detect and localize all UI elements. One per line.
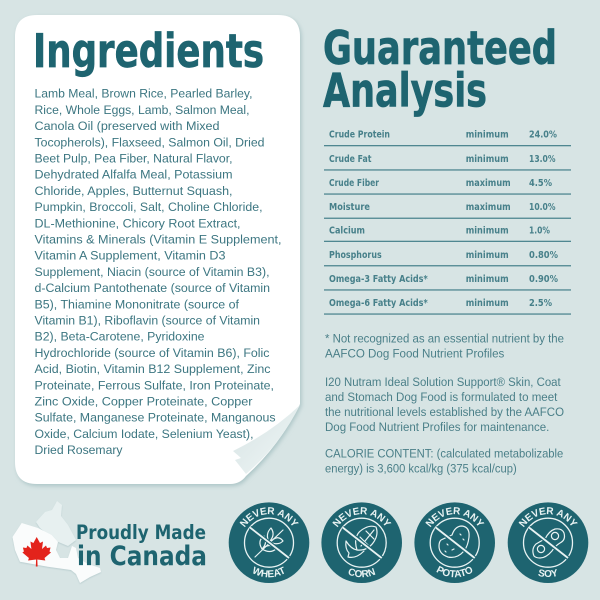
row: omega-3: Omega-3 Fatty Acids* [329,274,428,285]
icon: wheat [255,528,283,557]
text block: aafco footnote: * Not recognized as an essential nutrient by the [325,332,564,346]
badge: never any soy: NEVER ANY [518,507,578,528]
ingredients list: DL-Methionine, Chicory Root Extract, [34,216,241,230]
ingredients list: Proteinate, Ferrous Sulfate, Iron Proteinate, [34,378,274,392]
slogan: Proudly Made [76,521,206,544]
row: phosphorus [324,250,571,266]
row: omega-6 [324,298,571,315]
row: omega-6: 2.5% [529,298,552,309]
row: omega-6: minimum [466,298,509,309]
icon: soybean pod [533,529,564,558]
row: omega-3 [324,274,571,291]
ingredients list: B2), Beta-Carotene, Pyridoxine [34,330,205,344]
ingredients list: Vitamin A Supplement, Vitamin D3 [34,249,226,263]
row: moisture: maximum [466,202,511,213]
row: crude fiber: Crude Fiber [329,178,379,189]
table: guaranteed analysis values [324,130,571,315]
icon: potato [439,526,469,557]
slogan: in Canada [77,541,207,572]
icon: maple leaf [22,537,51,566]
ingredients list: Rice, Whole Eggs, Lamb, Salmon Meal, [34,103,250,117]
badge: never any soy [508,502,588,583]
row: crude protein: Crude Protein [329,130,390,140]
row: moisture: Moisture [329,202,370,213]
row: phosphorus: 0.80% [529,250,558,261]
badge: never any soy: SOY [538,569,557,577]
ingredients list: Vitamins & Minerals (Vitamin E Supplement, [34,232,282,246]
panel: ingredients card [15,15,300,484]
row: omega-3: 0.90% [529,274,558,285]
row: crude fiber [324,178,571,195]
ingredients list: Zinc Oxide, Copper Proteinate, Copper [34,394,252,408]
badge: never any wheat: WHEAT [253,566,284,578]
page curl [233,405,300,474]
badge: never any potato: NEVER ANY [425,507,484,528]
ingredients list: Beet Pulp, Pea Fiber, Natural Flavor, [34,152,232,166]
row: calcium: minimum [466,226,509,236]
ingredients list [34,87,282,457]
row: crude fat: Crude Fat [329,154,372,165]
ingredients list: Chloride, Apples, Butternut Squash, [34,184,232,198]
badge: proudly made in canada [12,501,207,583]
ingredients list: Vitamin B1), Riboflavin (source of Vitamin [34,314,260,328]
ingredients list: Sulfate, Manganese Proteinate, Manganous [34,411,276,425]
ingredients list: d-Calcium Pantothenate (source of Vitamin [34,281,270,295]
ingredients list: Tocopherols), Flaxseed, Salmon Oil, Dried [34,135,264,149]
heading: guaranteed analysis: Analysis [323,64,487,118]
badge: never any wheat: NEVER ANY [240,507,299,528]
slogan [76,521,207,572]
ingredients list: Dried Rosemary [34,443,123,457]
ingredients list: Oxide, Calcium Iodate, Selenium Yeast), [34,427,253,441]
card sheet with curled corner [15,15,300,484]
row: crude protein: 24.0% [529,130,557,140]
text block: formulation statement: I20 Nutram Ideal Solution Support® Skin, Coat [325,375,561,389]
text block: calorie content: CALORIE CONTENT: (calculated metabolizable [325,446,563,460]
ingredients list: Canola Oil (preserved with Mixed [34,119,220,133]
text block: aafco footnote [325,332,564,361]
row: crude fat: 13.0% [529,154,556,165]
badge: never any wheat [228,502,310,583]
row: crude protein [324,130,571,146]
row: omega-3: minimum [466,274,509,285]
text block: calorie content [325,446,563,476]
icon: map of canada [12,501,101,583]
ingredients list: Dehydrated Alfalfa Meal, Potassium [34,168,232,182]
ingredients list: Lamb Meal, Brown Rice, Pearled Barley, [34,87,252,101]
row: crude fat [324,154,571,171]
row: moisture [324,202,571,219]
text block: calorie content: energy) is 3,600 kcal/kg (375 kcal/cup) [325,462,517,476]
row: moisture: 10.0% [529,202,556,213]
text block: formulation statement [325,375,564,434]
text block: formulation statement: and Stomach Dog Food is formulated to meet [325,390,558,404]
ingredients list: Pumpkin, Broccoli, Salt, Choline Chloride, [34,200,262,214]
row: calcium: 1.0% [529,226,550,236]
ingredients list: Acid, Biotin, Vitamin B12 Supplement, Zinc [34,362,270,376]
row: crude fiber: maximum [466,178,511,189]
row: phosphorus: Phosphorus [329,250,382,261]
heading: guaranteed analysis [323,21,557,118]
row: calcium: Calcium [329,226,365,236]
heading: ingredients: Ingredients [33,24,264,78]
row: crude fat: minimum [466,154,509,165]
ingredients list: Hydrochloride (source of Vitamin B6), Folic [34,346,270,360]
text block: formulation statement: the nutritional levels established by the AAFCO [325,405,564,419]
badge: never any potato [414,502,495,583]
text block: aafco footnote: AAFCO Dog Food Nutrient Profiles [325,347,504,361]
badge: never any potato: POTATO [436,566,472,578]
badge: never any corn: CORN [348,568,376,578]
row: calcium [324,226,571,242]
text block: formulation statement: Dog Food Nutrient Profiles for maintenance. [325,420,549,434]
badge: never any corn: NEVER ANY [332,507,392,528]
ingredients list: B5), Thiamine Mononitrate (source of [34,297,240,311]
row: crude fiber: 4.5% [529,178,552,189]
badge: never any corn [321,502,402,583]
row: phosphorus: minimum [466,250,509,261]
icon: corn [346,526,377,557]
ingredients list: Supplement, Niacin (source of Vitamin B3), [34,265,270,279]
row: omega-6: Omega-6 Fatty Acids* [329,298,428,309]
row: crude protein: minimum [466,130,509,140]
